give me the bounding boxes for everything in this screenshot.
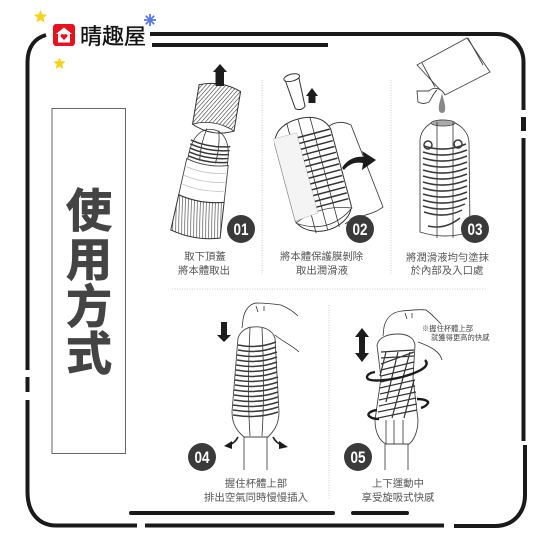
illustration: hand [242,303,299,352]
illustration: lube packet [417,38,490,104]
badge 05 [344,443,372,471]
caption 4 [204,477,309,504]
arrow: double vertical [355,328,369,362]
illustration: hand [383,310,442,360]
dotted step dividers [172,80,486,500]
step 3 [406,38,490,277]
illustration: sleeve [375,334,418,470]
caption 2: 取出潤滑液 [296,264,349,277]
badge 03 [461,215,489,243]
caption 3 [406,251,490,277]
callout note [422,324,490,342]
badge 01 [227,215,255,243]
callout note: 就獲得更高的快感 [431,333,490,342]
icon: yellow star top [34,10,47,22]
badge 01: 01 [234,220,248,239]
arrow: small up [306,88,318,103]
brand logo [53,24,146,49]
caption 1 [178,251,230,277]
badge 04: 04 [194,448,210,467]
illustration: inner sleeve [283,72,307,112]
caption 1: 將本體取出 [178,264,230,277]
vertical heading: 方 [66,281,112,333]
badge 03: 03 [468,220,482,239]
caption 1: 取下頂蓋 [184,251,226,263]
caption 5: 享受旋吸式快感 [362,491,435,504]
caption 5 [362,477,435,504]
callout note: ※握住杯體上部 [422,324,473,333]
caption 5: 上下運動中 [372,477,424,490]
step 2 [270,72,383,277]
arrow: curved right [342,151,376,170]
caption 3: 將潤滑液均勻塗抹 [406,251,490,264]
panel: title box [52,108,126,454]
icon: yellow star bottom [54,58,66,69]
brand name: 晴趣屋 [80,24,146,49]
step 5 [344,310,490,504]
illustration: sleeve [232,327,279,470]
caption 4: 握住杯體上部 [225,477,287,490]
illustration: sleeve with spiral [420,120,470,238]
vertical heading: 式 [66,328,112,380]
arrow: up [213,64,227,86]
badge 02 [346,215,374,243]
illustration: sleeve body [270,111,356,238]
illustration: tube with cap removed [170,80,245,242]
illustration: drop [439,93,445,113]
arrow: down [217,322,231,342]
caption 2 [280,250,364,277]
caption 2: 將本體保護膜剝除 [280,250,364,263]
vertical heading: 使 [66,185,112,237]
arrows: swirl [367,360,428,419]
step 1 [170,64,255,277]
icon: blue snowflake [144,14,156,26]
vertical heading [66,185,112,380]
vertical heading: 用 [66,234,112,286]
badge 04 [188,443,216,471]
caption 4: 排出空氣同時慢慢插入 [204,491,309,504]
illustration: protective film [327,122,383,224]
icon: red house [53,24,75,46]
badge 05: 05 [350,448,366,467]
badge 02: 02 [352,220,368,239]
step 4 [188,303,309,504]
caption 3: 於內部及入口處 [411,264,484,277]
arrows: air outflow [224,437,288,449]
